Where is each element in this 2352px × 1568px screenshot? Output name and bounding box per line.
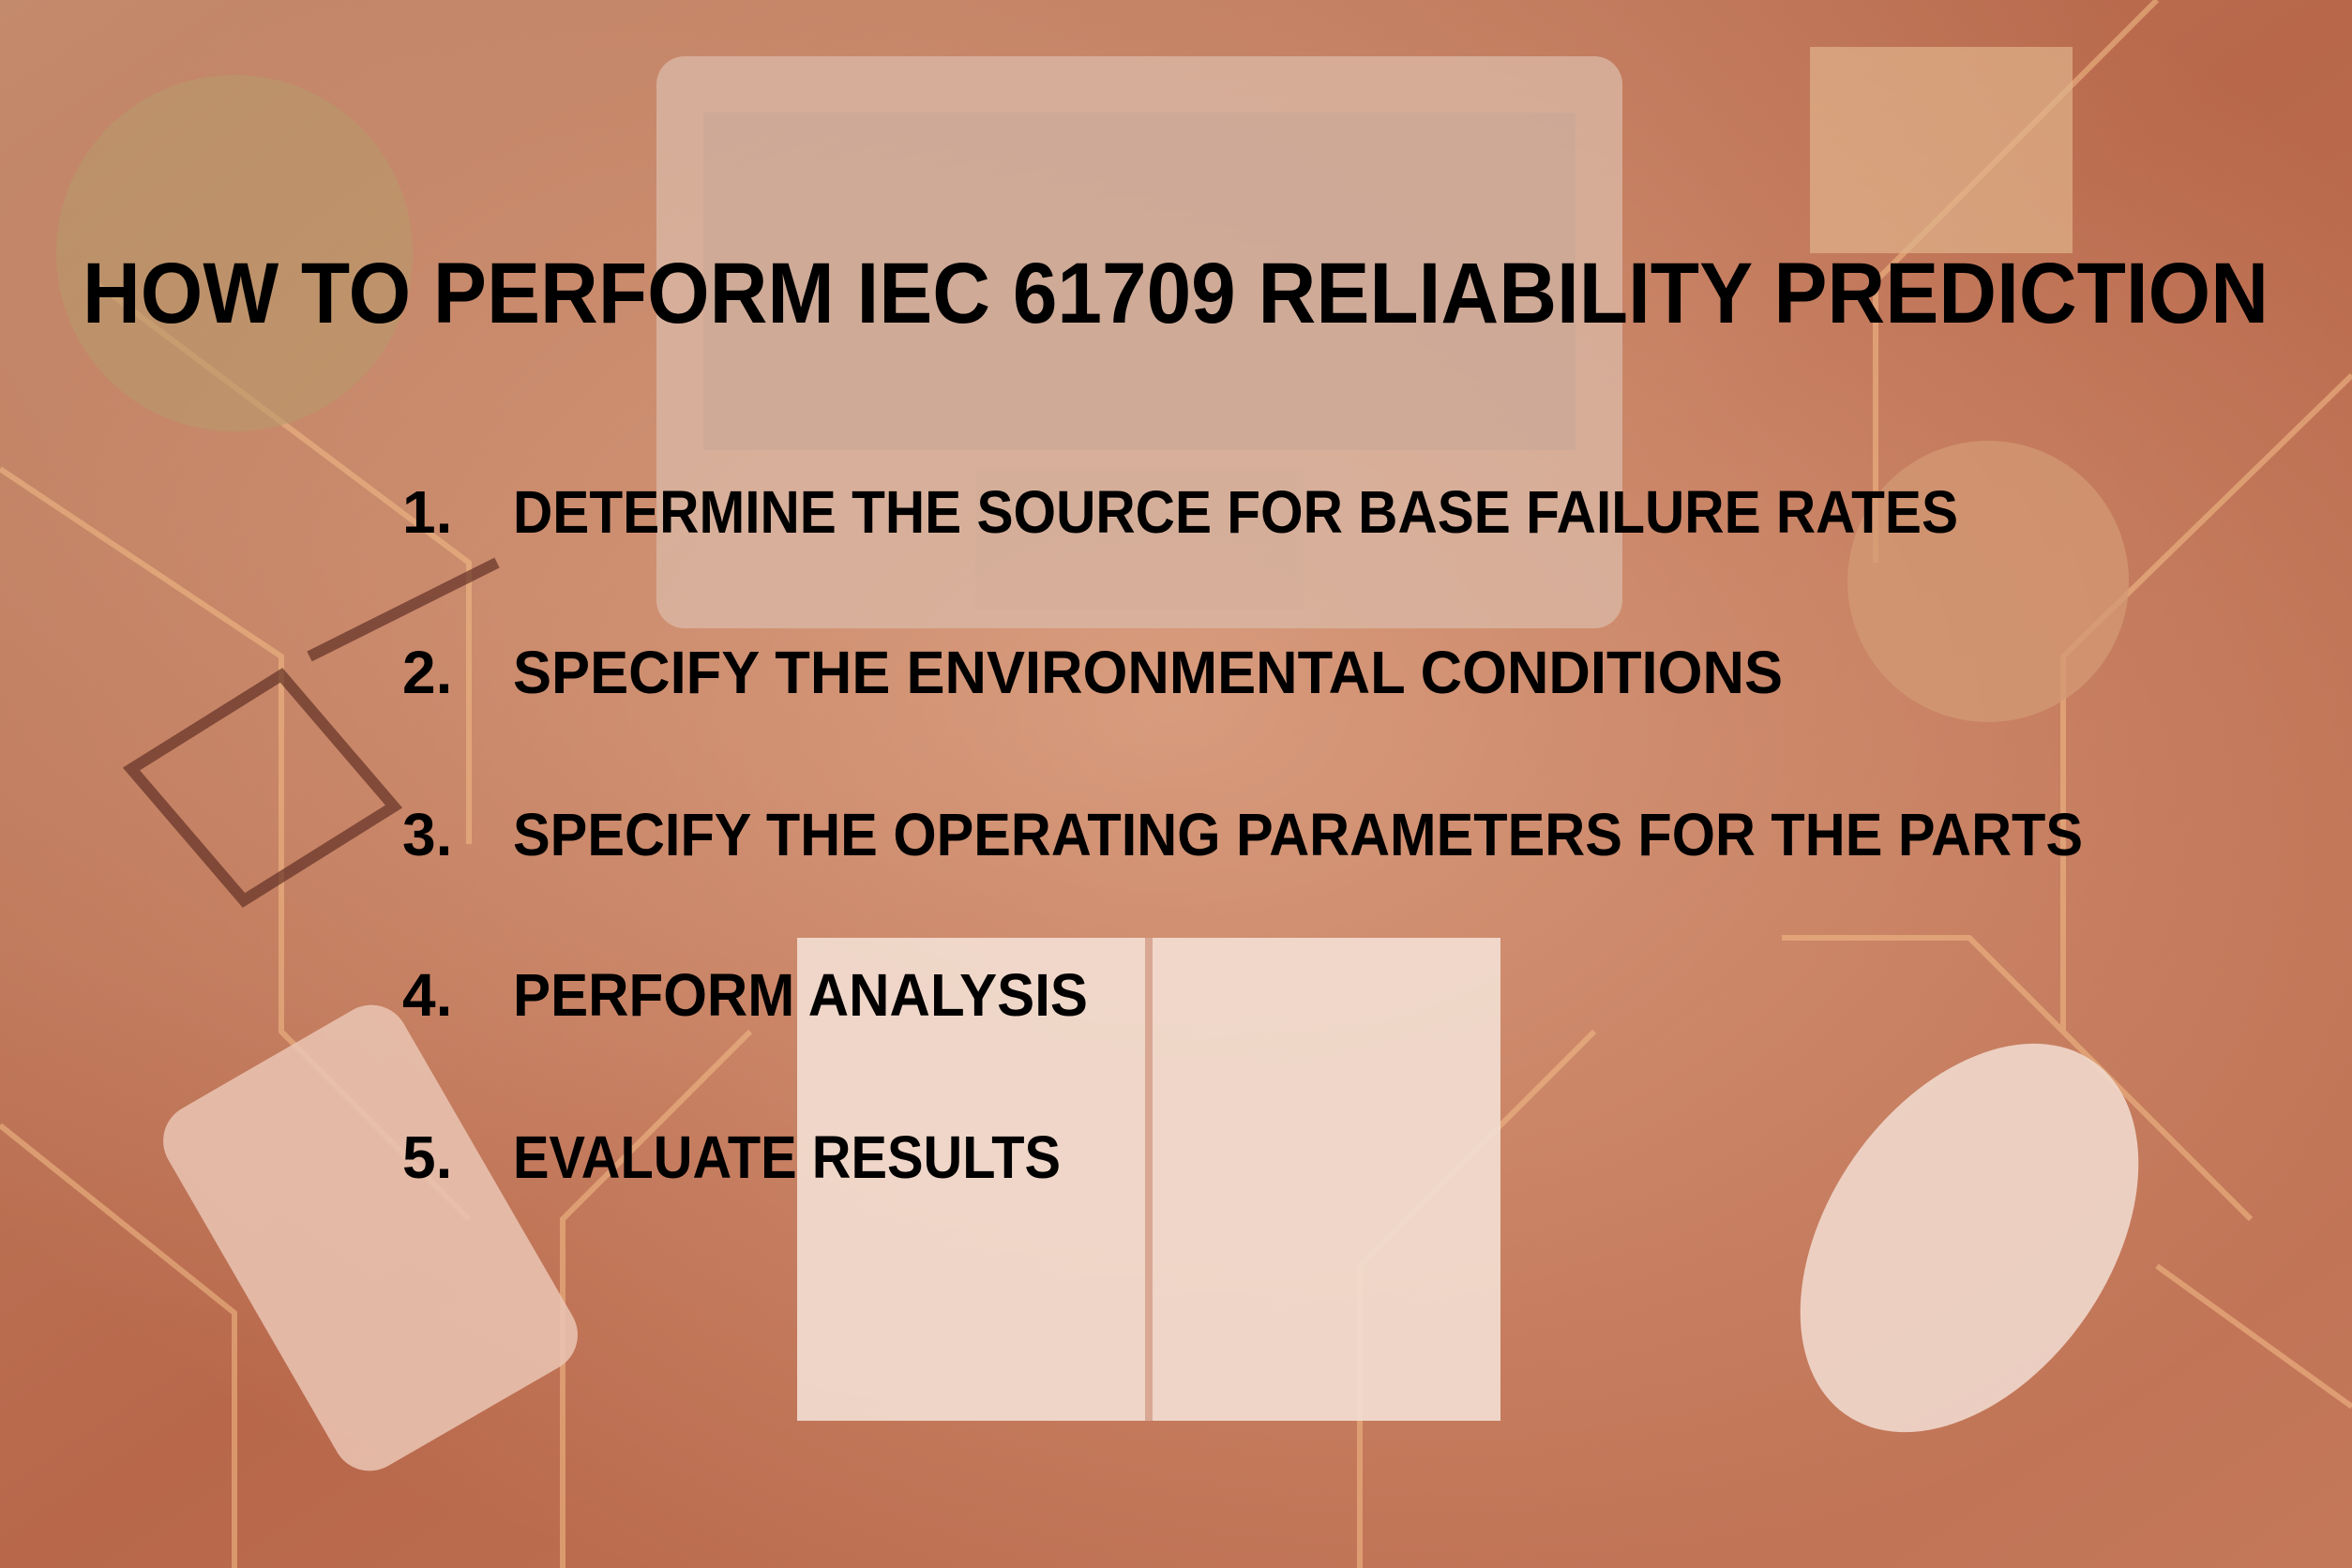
step 2: SPECIFY THE ENVIRONMENTAL CONDITIONS xyxy=(513,639,1783,706)
mouse xyxy=(1730,981,2209,1495)
step 4: 4. xyxy=(402,961,452,1029)
step 2: 2. xyxy=(402,639,452,706)
list of steps xyxy=(402,478,2083,1191)
phone xyxy=(149,991,592,1485)
notebook xyxy=(797,938,1500,1421)
step 4: PERFORM ANALYSIS xyxy=(513,961,1088,1029)
step 3: SPECIFY THE OPERATING PARAMETERS FOR THE PARTS xyxy=(513,801,2083,868)
bowl of pins xyxy=(1847,441,2129,722)
step 5: 5. xyxy=(402,1123,452,1191)
step 3: 3. xyxy=(402,801,452,868)
glasses xyxy=(131,563,497,900)
pencil holder xyxy=(1810,47,2073,253)
step 1: 1. xyxy=(402,478,452,546)
step 5: EVALUATE RESULTS xyxy=(513,1123,1061,1191)
plant xyxy=(56,75,413,431)
laptop xyxy=(656,56,1622,628)
step 1: DETERMINE THE SOURCE FOR BASE FAILURE RATES xyxy=(513,478,1958,546)
